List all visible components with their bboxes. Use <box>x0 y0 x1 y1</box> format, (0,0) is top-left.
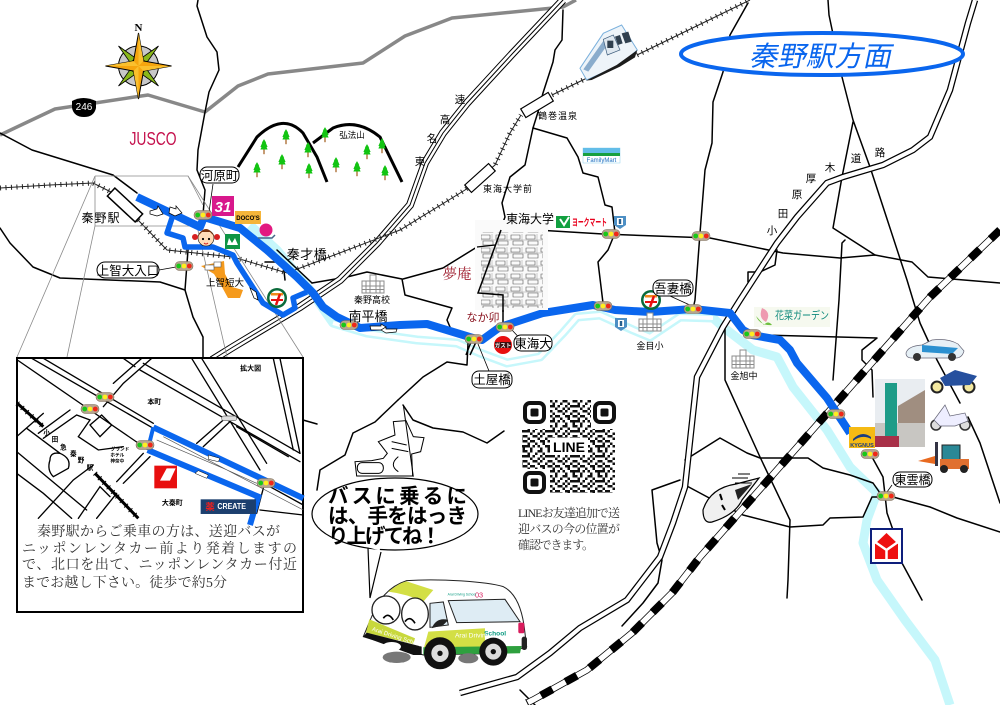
logo: FamilyMart: FamilyMart <box>587 158 617 164</box>
logo: ヨークマート: ヨークマート <box>572 217 607 229</box>
station: 鶴巻温泉: 鶴巻温泉 <box>538 110 578 121</box>
expressway: 小田原厚木道路: 道 <box>851 152 862 165</box>
logo: FamilyMart <box>583 148 620 164</box>
inset panel: 拡大図: 秦野駅からご乗車の方は、送迎バスが <box>37 523 280 540</box>
JUSCO logo: JUSCO <box>130 129 176 149</box>
title ellipse: 秦野駅方面 <box>681 33 963 75</box>
campus shape: 上智短大 <box>201 261 244 298</box>
logo: ヨークマート <box>556 216 607 229</box>
expressway: 小田原厚木道路 <box>460 0 975 693</box>
traffic light 土屋橋 <box>465 334 483 344</box>
expressway: 東名高速: 東 <box>415 155 426 168</box>
campus shape: 上智短大: 上智短大 <box>206 277 244 289</box>
expressway: 小田原厚木道路: 木 <box>825 162 836 174</box>
inset panel: 拡大図: CREATE <box>217 502 247 511</box>
inset panel: 拡大図: グランド <box>111 445 130 452</box>
inset panel: 拡大図: 大秦町 <box>162 498 183 507</box>
inset panel: 拡大図: 小 <box>43 428 50 437</box>
illustrated bus: Arai Driving School <box>371 627 421 648</box>
inset panel: 拡大図: 本町 <box>147 397 161 406</box>
expressway: 小田原厚木道路: 小 <box>767 225 778 237</box>
inset panel: 拡大図: 田 <box>52 436 59 444</box>
inset panel: 拡大図: までお越し下さい。徒歩で約5分 <box>22 574 227 591</box>
expressway: 小田原厚木道路: 田 <box>778 208 788 220</box>
QR code <box>520 398 617 495</box>
label: 秦才橋: 秦才橋 <box>287 247 327 262</box>
logo: KYGNUS <box>849 427 875 449</box>
logo: MOS Burger <box>225 234 240 249</box>
school: 秦野高校: 秦野高校 <box>354 294 390 305</box>
label: 上智大入口: 上智大入口 <box>97 263 159 278</box>
train illustration <box>580 25 637 81</box>
expressway: 東名高速: 名 <box>427 132 437 145</box>
inset panel: 拡大図: で、北口を出て、ニッポンレンタカー付近 <box>22 557 297 573</box>
logo: Yamada red house <box>871 529 902 563</box>
national route 246 (gray) <box>0 0 576 135</box>
label: 吾妻橋: 吾妻橋 <box>654 282 692 296</box>
QR code: LINE <box>553 439 585 455</box>
inset panel: 拡大図: ニッポンレンタカー前より発着しますの <box>22 541 297 557</box>
logo: 花菜ガーデン: 花菜ガーデン <box>775 308 829 322</box>
label: 東雲橋: 東雲橋 <box>894 473 931 487</box>
icon: shield south <box>615 318 627 331</box>
traffic light 東雲橋 <box>877 492 895 500</box>
station: 東海大学前 <box>465 164 533 194</box>
route 246 shield <box>72 98 96 117</box>
campus map: 東海大学 <box>475 220 548 312</box>
label: 土屋橋: 土屋橋 <box>473 373 511 387</box>
traffic light inset A <box>96 392 114 402</box>
inset panel: 拡大図: 野 <box>78 456 85 465</box>
logo: 花菜ガーデン <box>754 307 830 327</box>
LINE caption: 迎バスの今の位置が <box>518 521 620 536</box>
logo: Gusto <box>494 336 512 354</box>
direction arrows <box>150 206 397 333</box>
route 246 shield: 246 <box>76 102 93 113</box>
inset panel: 拡大図: 駅 <box>87 464 94 472</box>
inset panel: 拡大図: ホテル <box>110 451 125 458</box>
station: 秦野駅 <box>81 188 143 225</box>
illustrated bus: Arai Driving <box>455 632 490 639</box>
LINE caption <box>518 505 620 552</box>
logo: 7-Eleven near 秦才橋 <box>267 288 287 308</box>
label: 南平橋: 南平橋 <box>348 309 388 324</box>
logo: 31 ice cream <box>212 196 234 216</box>
illustrated bus: School <box>484 631 506 638</box>
logo: yellow shop sign <box>235 211 261 224</box>
traffic light 上智大入口 <box>175 262 193 270</box>
logo: 夢庵: 夢庵 <box>442 263 472 284</box>
school: 金旭中 <box>730 350 758 381</box>
icon: Peko-chan <box>192 229 220 246</box>
logo: KYGNUS: KYGNUS <box>850 443 874 449</box>
expressway: 東名高速: 速 <box>455 94 466 106</box>
traffic light inset D <box>257 478 275 488</box>
traffic light crossing rail <box>827 410 845 418</box>
traffic light 吾妻橋 <box>684 304 702 314</box>
mountains: 弘法山: 弘法山 <box>339 130 365 140</box>
icon: scooter <box>931 405 970 430</box>
inset panel: 拡大図: 秦 <box>70 449 77 458</box>
icon: driving school car <box>906 340 964 361</box>
label leader lines <box>159 184 892 492</box>
traffic light 南平橋 <box>340 320 358 330</box>
station: 鶴巻温泉 <box>521 92 578 121</box>
label text: 東海大学: 東海大学 <box>506 211 554 226</box>
expressway: 小田原厚木道路: 厚 <box>806 173 817 185</box>
title ellipse: 秦野駅方面: 秦野駅方面 <box>748 40 896 72</box>
river <box>250 225 950 705</box>
speech bubble: り上げてね！ <box>328 525 441 548</box>
traffic light 東海大 <box>496 322 514 332</box>
traffic light 河原町 <box>194 210 212 220</box>
expressway: 小田原厚木道路: 路 <box>875 146 886 159</box>
illustrated bus: Arai Driving School <box>448 592 476 596</box>
school: 金目小: 金目小 <box>636 340 664 351</box>
photo: driving school building <box>875 379 925 447</box>
building outlines inside hill <box>355 405 424 477</box>
logo: 7-Eleven near 吾妻橋 <box>641 290 661 310</box>
inset panel: 拡大図: 神奈中 <box>110 457 125 464</box>
inset panel: 拡大図: 急 <box>60 442 67 451</box>
railway: Odakyu line <box>0 0 750 273</box>
traffic light 東海大学 east <box>602 230 620 238</box>
speech bubble <box>312 478 478 598</box>
station: 秦野駅: 秦野駅 <box>81 211 121 225</box>
traffic light road east <box>692 232 710 240</box>
school: 金旭中: 金旭中 <box>730 370 758 381</box>
label: 河原町: 河原町 <box>201 169 239 183</box>
traffic light KYGNUS <box>861 450 879 458</box>
inset panel: 拡大図: 拡大図 <box>240 364 261 373</box>
speech bubble: バスに乗るに <box>328 485 467 508</box>
traffic light inset C <box>136 440 154 450</box>
icon: flying bird sign <box>703 474 759 522</box>
icon: shield north <box>614 216 626 229</box>
LINE caption: LINEお友達追加で送 <box>518 505 620 520</box>
school: 秦野高校 <box>354 275 390 305</box>
icon: motorcycle <box>932 370 977 392</box>
school: 金目小 <box>636 313 664 351</box>
illustrated bus <box>363 580 527 669</box>
inset panel: 拡大図: 薬 <box>205 501 215 512</box>
compass: N <box>135 22 143 34</box>
LINE caption: 確認できます。 <box>518 538 594 552</box>
label: 東海大: 東海大 <box>514 337 552 351</box>
logo: yellow shop sign: DOCO'S <box>236 216 260 222</box>
logo: pink balloon <box>258 224 275 238</box>
logo: Gusto: ガスト <box>495 342 511 350</box>
inset panel: 拡大図 <box>17 358 303 612</box>
expressway: 東名高速: 高 <box>440 113 450 126</box>
icon: forklift <box>918 442 969 473</box>
illustrated bus: 03 <box>475 590 483 599</box>
railway: Shinkansen dashed thick line <box>527 230 1000 703</box>
logo: 31 ice cream: 31 <box>215 199 231 216</box>
inset zoom guide lines <box>17 176 303 357</box>
speech bubble: は、手をはっき <box>328 505 467 528</box>
compass <box>106 22 172 99</box>
station: 東海大学前: 東海大学前 <box>483 183 533 194</box>
traffic light mid route <box>594 302 612 310</box>
bus route (blue) <box>137 197 850 433</box>
mountains: 弘法山 <box>238 123 402 182</box>
traffic light inset B <box>81 404 99 414</box>
traffic light 花菜ガーデン <box>743 330 761 338</box>
expressway: 東名高速 <box>212 0 563 360</box>
logo: なか卯: なか卯 <box>466 311 500 324</box>
expressway: 小田原厚木道路: 原 <box>792 189 803 201</box>
